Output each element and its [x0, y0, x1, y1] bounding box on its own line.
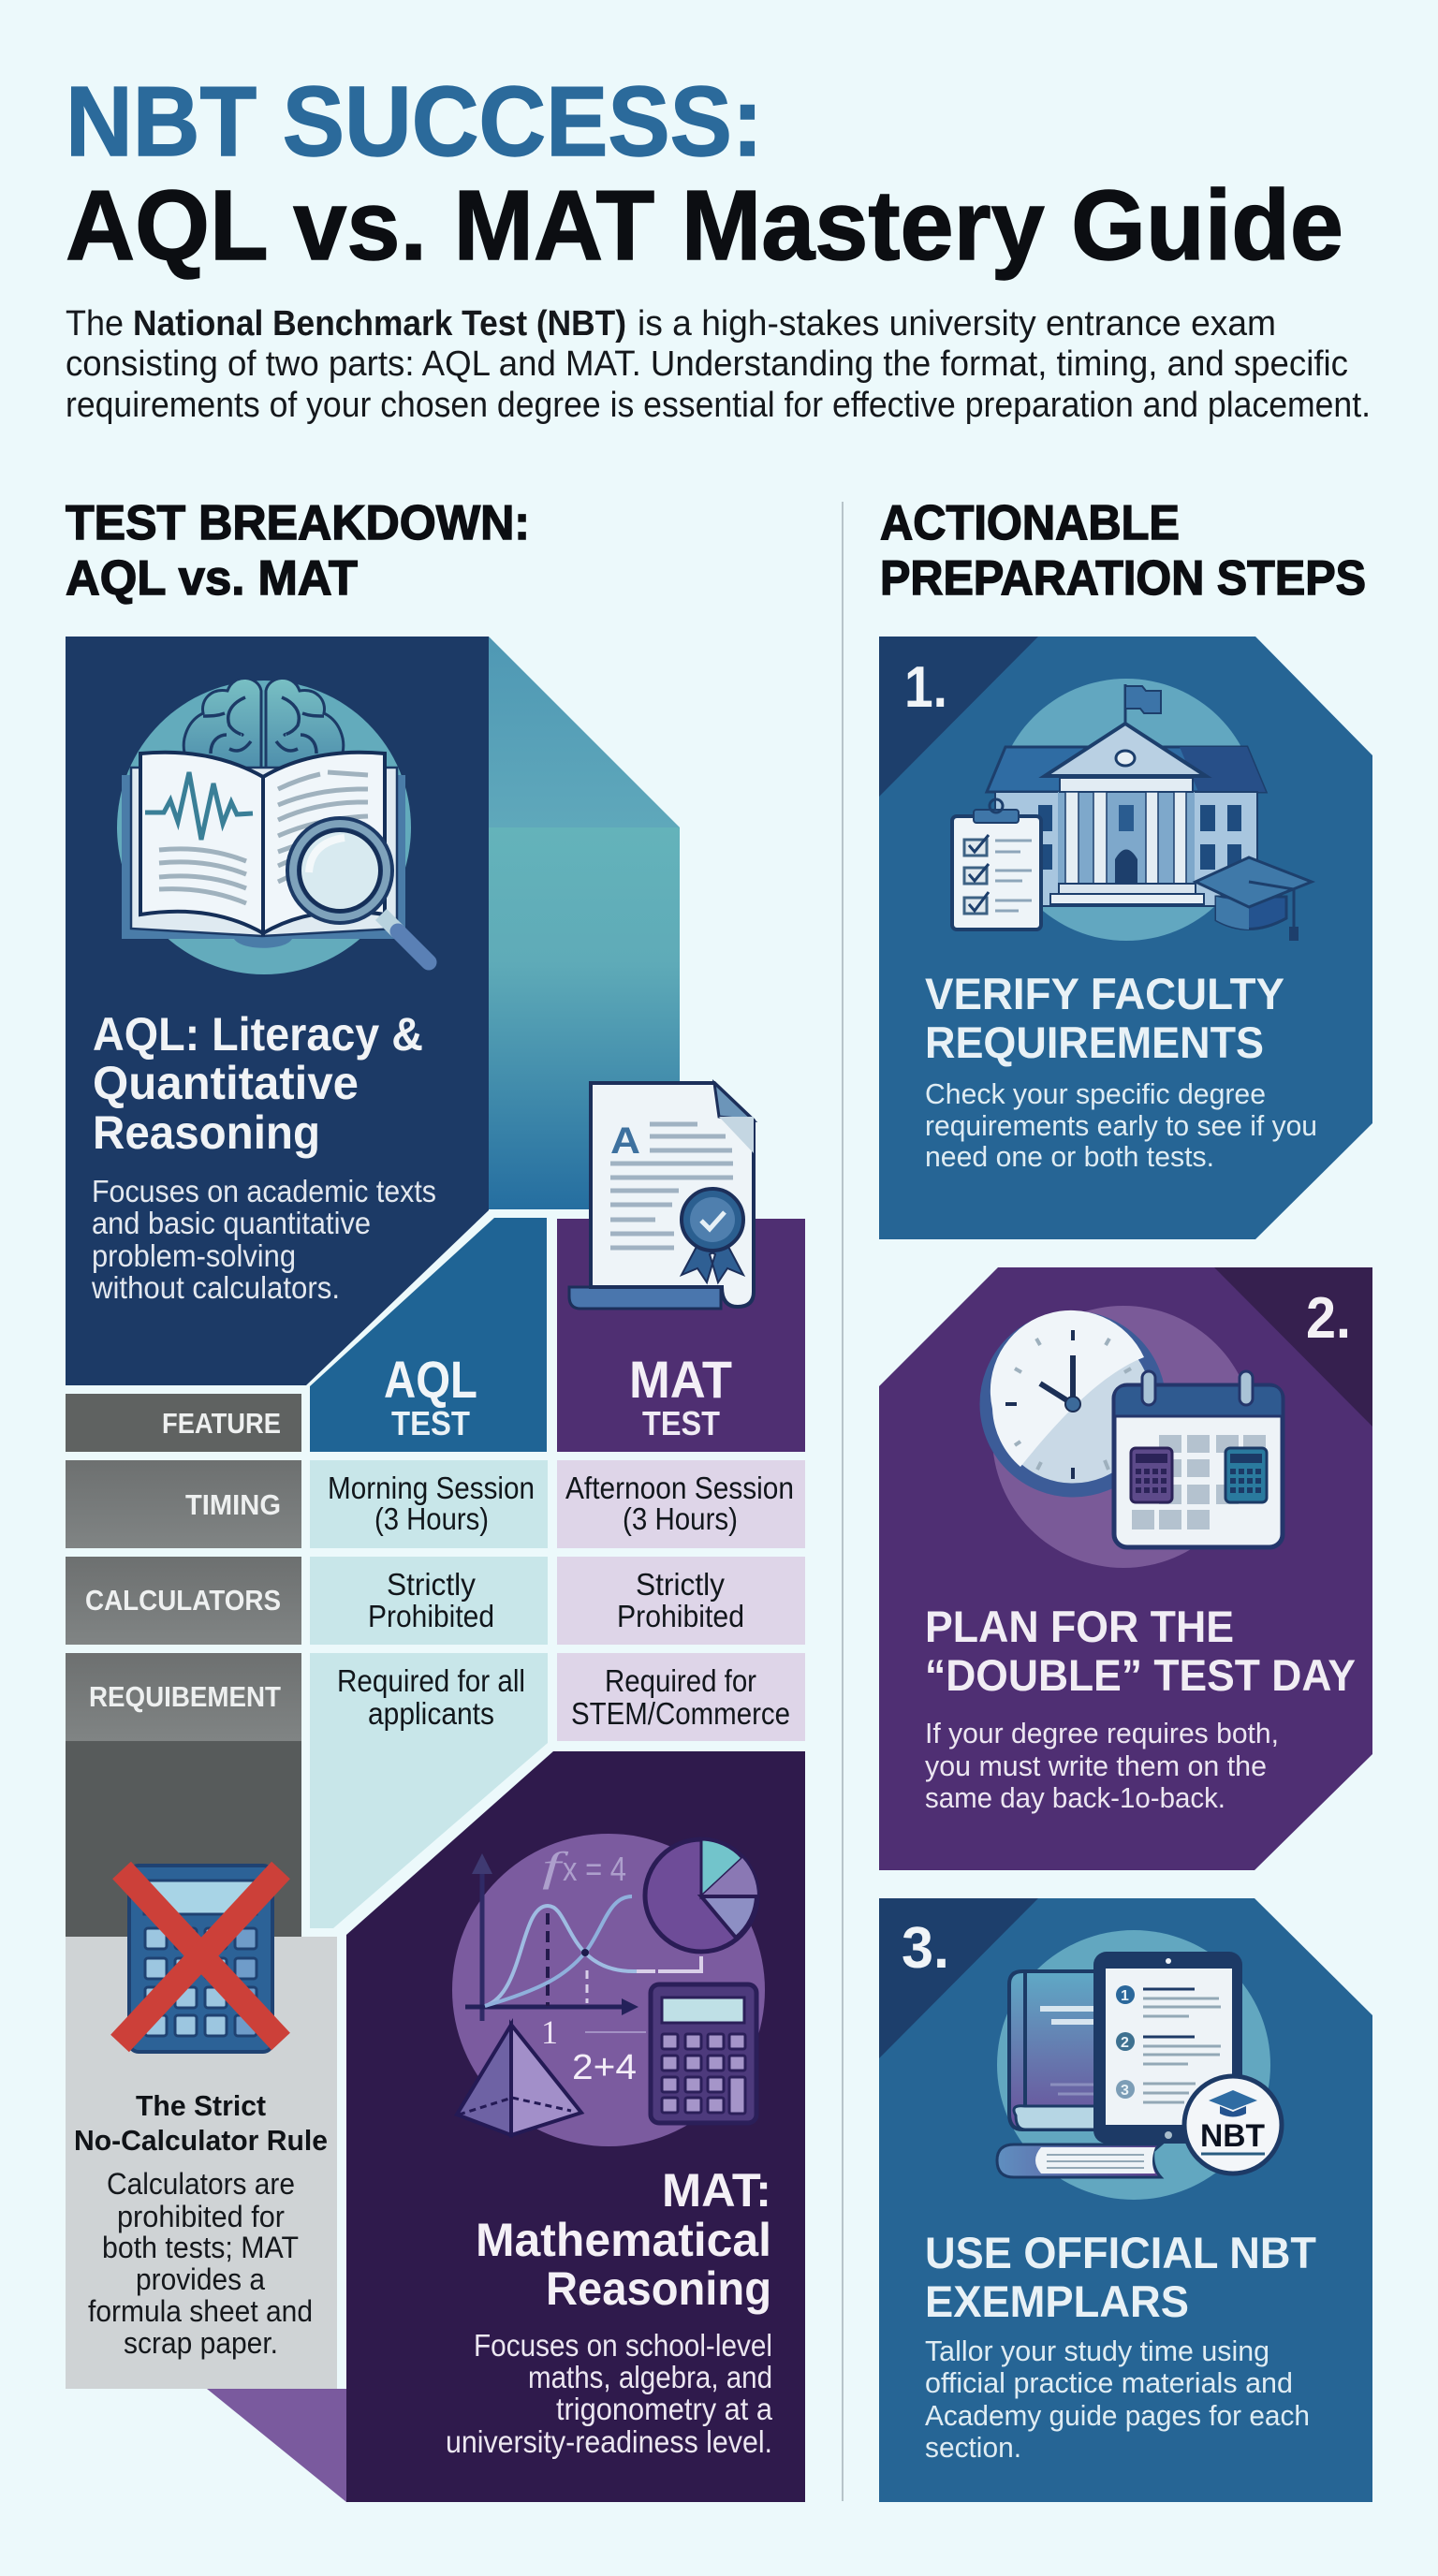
icon: books, tablet and NBT badge: 1	[1121, 1988, 1129, 2004]
icon: brain and open book with magnifier	[117, 678, 429, 974]
heading: MAT mathematical reasoning: Reasoning	[546, 2262, 771, 2315]
table column: AQL values: Morning Session	[328, 1471, 535, 1505]
icon: university, checklist and graduation cap	[952, 679, 1312, 941]
icon: books, tablet and NBT badge: NBT	[1200, 2118, 1265, 2154]
table column: AQL values: applicants	[368, 1696, 494, 1731]
table column: MAT values: STEM/Commerce	[571, 1696, 790, 1731]
icon: exam paper with ribbon	[569, 1083, 754, 1309]
row label: requirement: REQUIBEMENT	[89, 1680, 281, 1713]
row label: timing	[66, 1460, 301, 1548]
step number 2: 2.	[1306, 1286, 1351, 1351]
row label: requirement	[66, 1653, 301, 1741]
decorative purple fold	[207, 2389, 346, 2502]
table column: AQL values: Strictly	[387, 1567, 476, 1602]
heading: use official NBT exemplars	[925, 2228, 1316, 2326]
text: MAT description: trigonometry at a	[556, 2392, 773, 2426]
heading: test breakdown: TEST BREAKDOWN:	[66, 496, 530, 550]
text: step 1 description: requirements early to see if you	[925, 1109, 1317, 1142]
heading: use official NBT exemplars: USE OFFICIAL NBT	[925, 2228, 1316, 2277]
heading: MAT mathematical reasoning: MAT:	[662, 2164, 771, 2217]
icon: maths collage: f	[542, 1844, 569, 1890]
heading: the strict no-calculator rule: The Strict	[136, 2089, 266, 2122]
heading: actionable preparation steps	[880, 496, 1366, 606]
table column: MAT values: Prohibited	[617, 1599, 744, 1633]
heading: verify faculty requirements: VERIFY FACULTY	[925, 969, 1284, 1018]
heading: the strict no-calculator rule	[74, 2089, 328, 2157]
heading: actionable preparation steps: PREPARATION STEPS	[880, 551, 1366, 606]
heading: use official NBT exemplars: EXEMPLARS	[925, 2276, 1189, 2326]
text: step 3 description: Tallor your study time using	[925, 2334, 1269, 2367]
intro paragraph: requirements of your chosen degree is essential for effective preparation and placement.	[66, 386, 1371, 425]
text: no-calculator rule: Calculators are	[107, 2167, 295, 2201]
title: NBT SUCCESS:	[66, 66, 763, 177]
text: step 2 description: If your degree requires both,	[925, 1717, 1279, 1749]
heading: AQL literacy and quantitative reasoning: Reasoning	[93, 1106, 320, 1159]
table header: AQL test	[310, 1218, 547, 1452]
heading: verify faculty requirements: REQUIREMENTS	[925, 1017, 1264, 1067]
text: AQL description: problem-solving	[92, 1238, 296, 1273]
intro paragraph	[66, 304, 1371, 425]
text: step 2 description: same day back-1o-back.	[925, 1781, 1225, 1814]
text: AQL description: and basic quantitative	[92, 1206, 371, 1240]
text: no-calculator rule: provides a	[136, 2262, 265, 2296]
intro paragraph: is a high-stakes university entrance exam	[638, 304, 1276, 344]
panel: teal fold behind AQL	[489, 637, 680, 1209]
heading: verify faculty requirements	[925, 969, 1284, 1067]
icon: books, tablet and NBT badge: 3	[1121, 2083, 1129, 2099]
table column: MAT values: (3 Hours)	[623, 1501, 738, 1536]
intro paragraph: consisting of two parts: AQL and MAT. Understanding the format, timing, and specific	[66, 344, 1348, 384]
row label: timing: TIMING	[185, 1488, 281, 1521]
table column: MAT values: Required for	[605, 1663, 756, 1698]
icon: crossed-out calculator	[120, 1866, 281, 2052]
text: step 3 description: official practice materials and	[925, 2366, 1293, 2399]
text: MAT description: Focuses on school-level	[474, 2328, 772, 2363]
table header: AQL test: AQL	[384, 1350, 477, 1409]
heading: plan for the double test day: “DOUBLE” TEST DAY	[925, 1650, 1356, 1700]
step number 3: 3.	[902, 1916, 949, 1981]
icon: exam paper with ribbon: A	[610, 1120, 640, 1162]
text: step 3 description: Academy guide pages for each	[925, 2399, 1310, 2432]
table column: MAT values: Afternoon Session	[565, 1471, 794, 1505]
table header: MAT test: MAT	[629, 1350, 732, 1409]
row label: feature	[66, 1394, 301, 1452]
text: step 2 description	[925, 1717, 1279, 1814]
table column: MAT values: Strictly	[636, 1567, 725, 1602]
text: no-calculator rule: both tests; MAT	[102, 2231, 299, 2264]
icon: books, tablet and NBT badge	[997, 1930, 1282, 2200]
panel: step 3	[879, 1898, 1372, 2502]
heading: test breakdown: AQL vs. MAT	[66, 551, 358, 606]
text: step 3 description	[925, 2334, 1310, 2464]
text: MAT description: university-readiness level.	[446, 2424, 772, 2459]
icon: books, tablet and NBT badge: 2	[1121, 2035, 1129, 2051]
heading: test breakdown	[66, 496, 530, 606]
panel: no-calculator rule	[66, 1866, 337, 2389]
text: no-calculator rule: formula sheet and	[88, 2294, 313, 2328]
table header: MAT test	[557, 1219, 805, 1452]
heading: AQL literacy and quantitative reasoning	[93, 1008, 423, 1159]
icon: maths collage: 2+4	[572, 2048, 637, 2087]
table column: AQL values: Required for all	[337, 1663, 525, 1698]
text: no-calculator rule: prohibited for	[117, 2200, 285, 2233]
text: step 2 description: you must write them on the	[925, 1749, 1267, 1782]
text: step 1 description	[925, 1077, 1317, 1173]
text: no-calculator rule: scrap paper.	[124, 2326, 278, 2360]
row label: feature: FEATURE	[162, 1407, 281, 1440]
text: AQL description: Focuses on academic texts	[92, 1174, 436, 1208]
step number 1: 1.	[904, 655, 947, 720]
heading: MAT mathematical reasoning: Mathematical	[476, 2214, 771, 2266]
heading: plan for the double test day	[925, 1602, 1356, 1700]
text: AQL description	[91, 1174, 436, 1305]
text: step 1 description: Check your specific degree	[925, 1077, 1266, 1110]
panel: dark grey block under table	[66, 1741, 301, 1937]
table row labels	[66, 1394, 301, 1741]
panel: AQL description	[66, 637, 489, 1385]
text: step 1 description: need one or both tests.	[925, 1140, 1214, 1173]
icon: maths collage: x = 4	[563, 1850, 626, 1888]
table column: AQL values	[310, 1460, 548, 1928]
text: MAT description: maths, algebra, and	[528, 2360, 772, 2394]
table column: AQL values: (3 Hours)	[374, 1501, 489, 1536]
heading: MAT mathematical reasoning	[476, 2164, 771, 2315]
title: AQL vs. MAT Mastery Guide	[66, 170, 1343, 281]
icon: clock and calendar	[987, 1306, 1283, 1568]
heading: plan for the double test day: PLAN FOR THE	[925, 1602, 1234, 1651]
text: AQL description: without calculators.	[91, 1270, 340, 1305]
table header: AQL test: TEST	[391, 1404, 470, 1442]
table column: MAT values	[557, 1460, 805, 1741]
panel: step 1	[879, 637, 1372, 1239]
heading: AQL literacy and quantitative reasoning: AQL: Literacy &	[93, 1008, 423, 1061]
row label: calculators	[66, 1557, 301, 1645]
heading: AQL literacy and quantitative reasoning: Quantitative	[93, 1057, 359, 1109]
panel: MAT description	[346, 1751, 805, 2502]
title	[66, 66, 1343, 281]
table header: MAT test: TEST	[642, 1404, 720, 1442]
text: no-calculator rule	[88, 2167, 313, 2360]
table column: AQL values: Prohibited	[368, 1599, 494, 1633]
icon: maths collage	[452, 1834, 765, 2146]
intro paragraph: The	[66, 304, 124, 344]
heading: actionable preparation steps: ACTIONABLE	[880, 496, 1180, 550]
row label: calculators: CALCULATORS	[85, 1584, 281, 1617]
panel: step 2	[879, 1267, 1372, 1870]
text: MAT description	[446, 2328, 773, 2459]
text: step 3 description: section.	[925, 2431, 1021, 2464]
intro paragraph: National Benchmark Test (NBT)	[133, 304, 626, 344]
heading: the strict no-calculator rule: No-Calculator Rule	[74, 2124, 328, 2157]
icon: maths collage: 1	[541, 2013, 558, 2051]
